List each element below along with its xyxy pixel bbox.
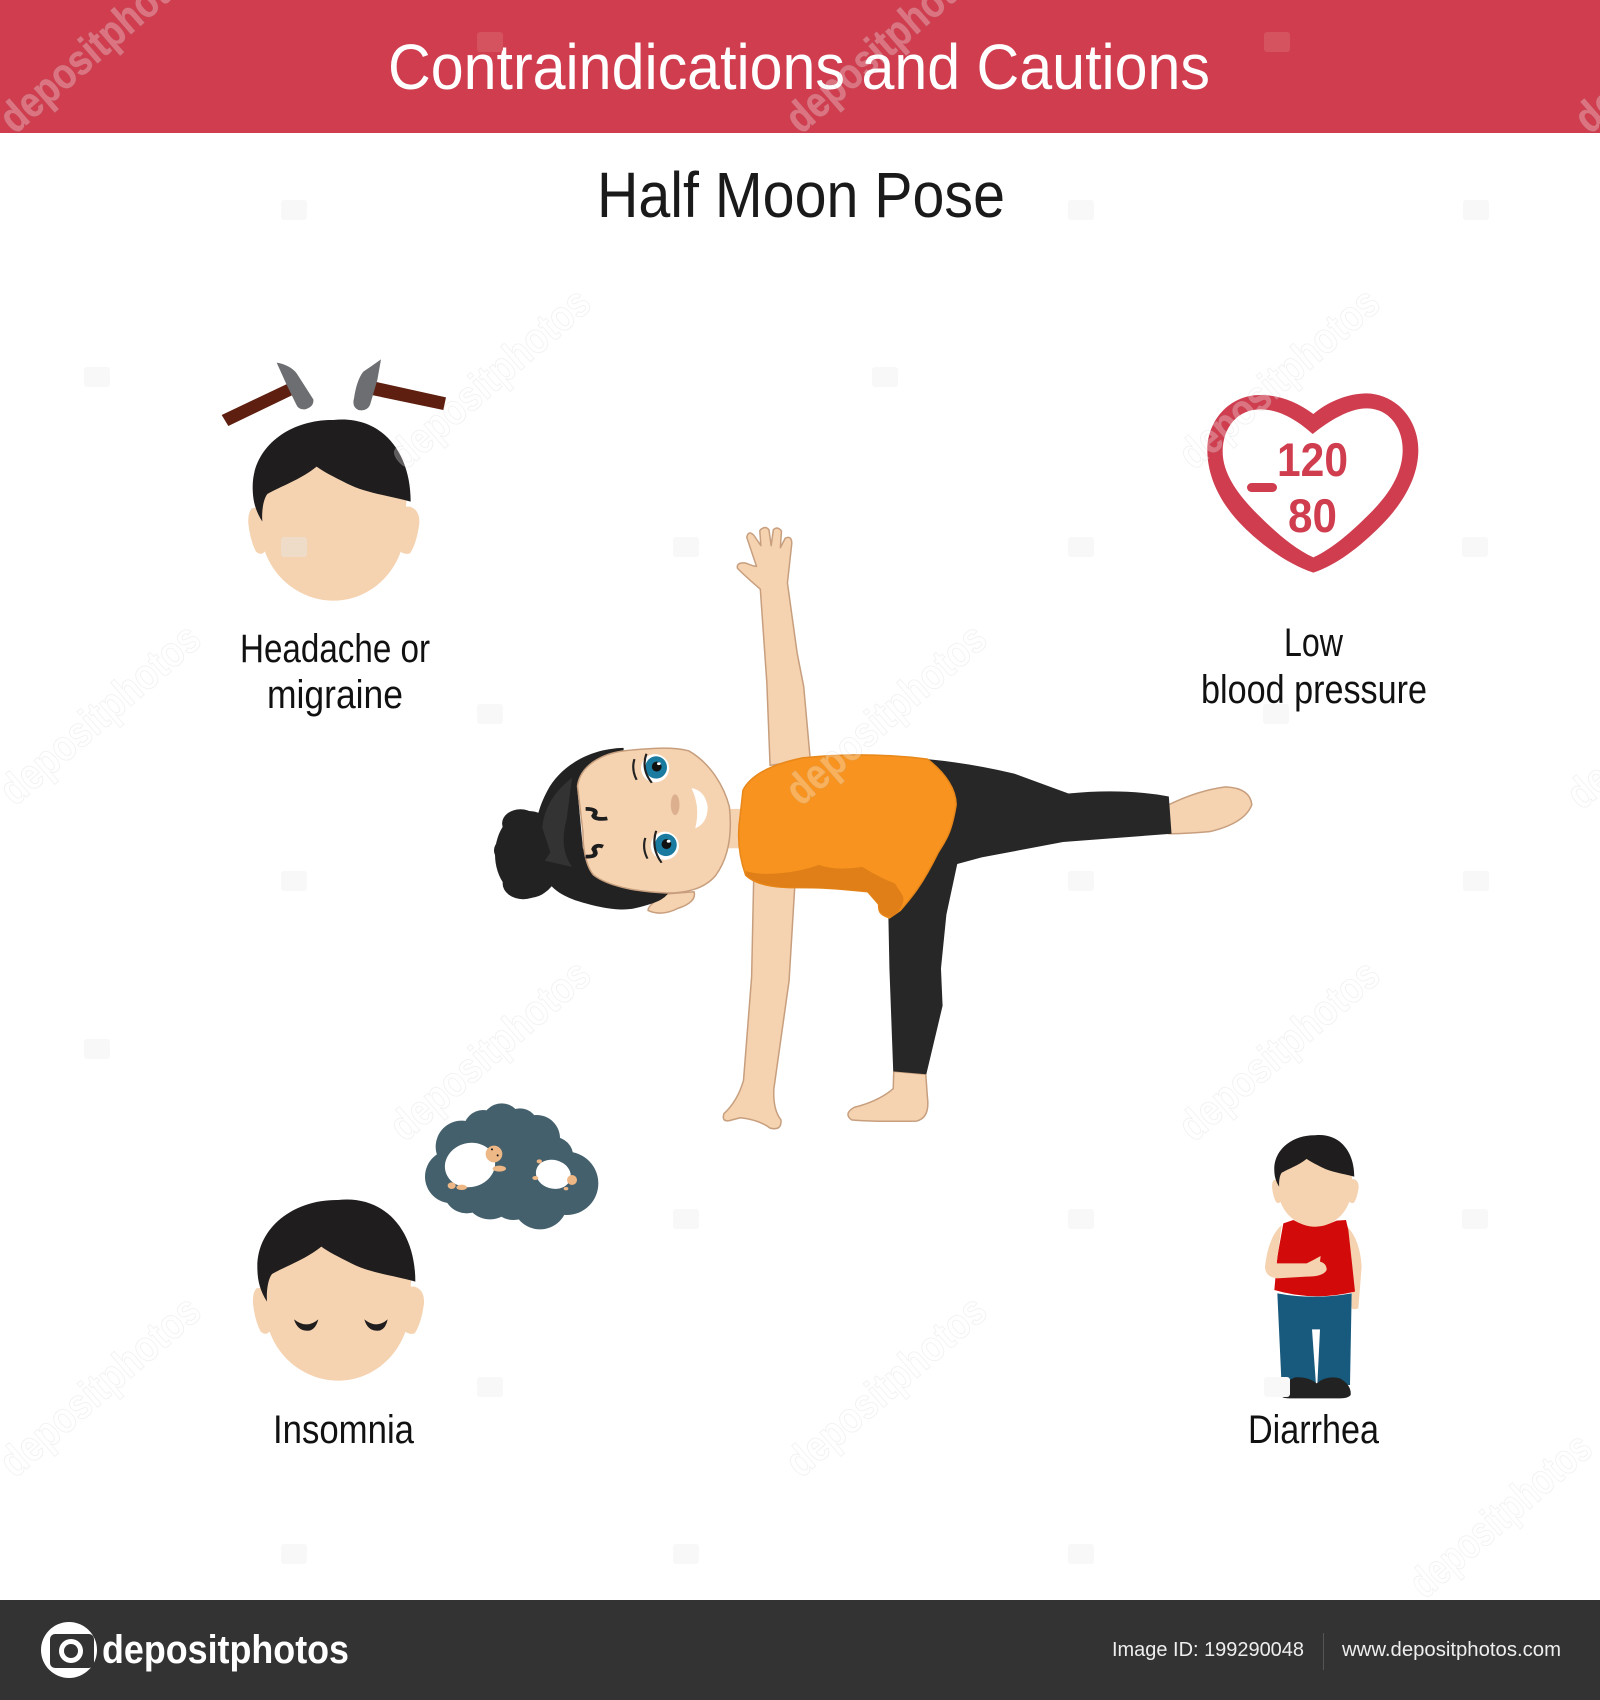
watermark overlay: depositphotos (1169, 278, 1389, 479)
raised foot (1169, 787, 1252, 834)
panel: insomnia (253, 1103, 598, 1452)
icon: camera logo (41, 1622, 97, 1678)
watermark overlay: depositphotos (1169, 950, 1389, 1151)
panel: diarrhea (1248, 1135, 1380, 1452)
website: www.depositphotos.com (1341, 1639, 1561, 1661)
label: low blood pressure: Low (1284, 621, 1343, 665)
icon: heart with reading (1207, 393, 1418, 573)
label: low blood pressure: blood pressure (1201, 668, 1427, 712)
hair highlight (542, 778, 572, 867)
watermark overlay: depositphotos (380, 950, 600, 1151)
header banner: Contraindications and Cautions (388, 31, 1210, 103)
hair (535, 748, 670, 909)
label: insomnia: Insomnia (273, 1408, 415, 1452)
icon: thought cloud with sheep (425, 1103, 598, 1229)
subtitle: Half Moon Pose (597, 159, 1005, 231)
leggings (888, 759, 1172, 1074)
hair bun (494, 809, 562, 899)
label: headache or migraine: Headache or (240, 627, 430, 671)
logo wordmark: depositphotos (102, 1628, 349, 1672)
label: diarrhea: Diarrhea (1248, 1408, 1380, 1452)
watermark overlay: depositphotos (776, 1286, 996, 1487)
icon: person holding stomach (1265, 1135, 1362, 1398)
watermark overlay: depositphotos (380, 278, 600, 479)
image id: Image ID: 199290048 (1112, 1639, 1304, 1661)
panel: headache or migraine (222, 359, 446, 717)
lower arm (723, 873, 796, 1129)
footer bar (0, 1600, 1600, 1700)
eyebrows (586, 809, 607, 857)
raised arm (737, 528, 810, 765)
mouth (691, 788, 708, 828)
label: headache or migraine (240, 627, 430, 717)
eyes (633, 754, 679, 863)
label: low blood pressure (1201, 621, 1427, 712)
face (577, 748, 730, 893)
panel: low blood pressure (1201, 393, 1427, 712)
icon: sleeping head (253, 1200, 424, 1381)
label: headache or migraine: migraine (267, 673, 403, 717)
icon: heart with reading: 80 (1288, 489, 1337, 542)
icon: hammers and head (222, 359, 446, 601)
standing foot (848, 1071, 928, 1121)
figure: half moon pose (494, 528, 1252, 1129)
nose (671, 794, 679, 815)
icon: heart with reading: 120 (1277, 433, 1348, 486)
neck (728, 809, 744, 848)
header banner (0, 0, 1600, 133)
ear (648, 892, 694, 913)
watermark overlay: depositphotos (776, 614, 996, 815)
orange shirt (739, 755, 956, 918)
